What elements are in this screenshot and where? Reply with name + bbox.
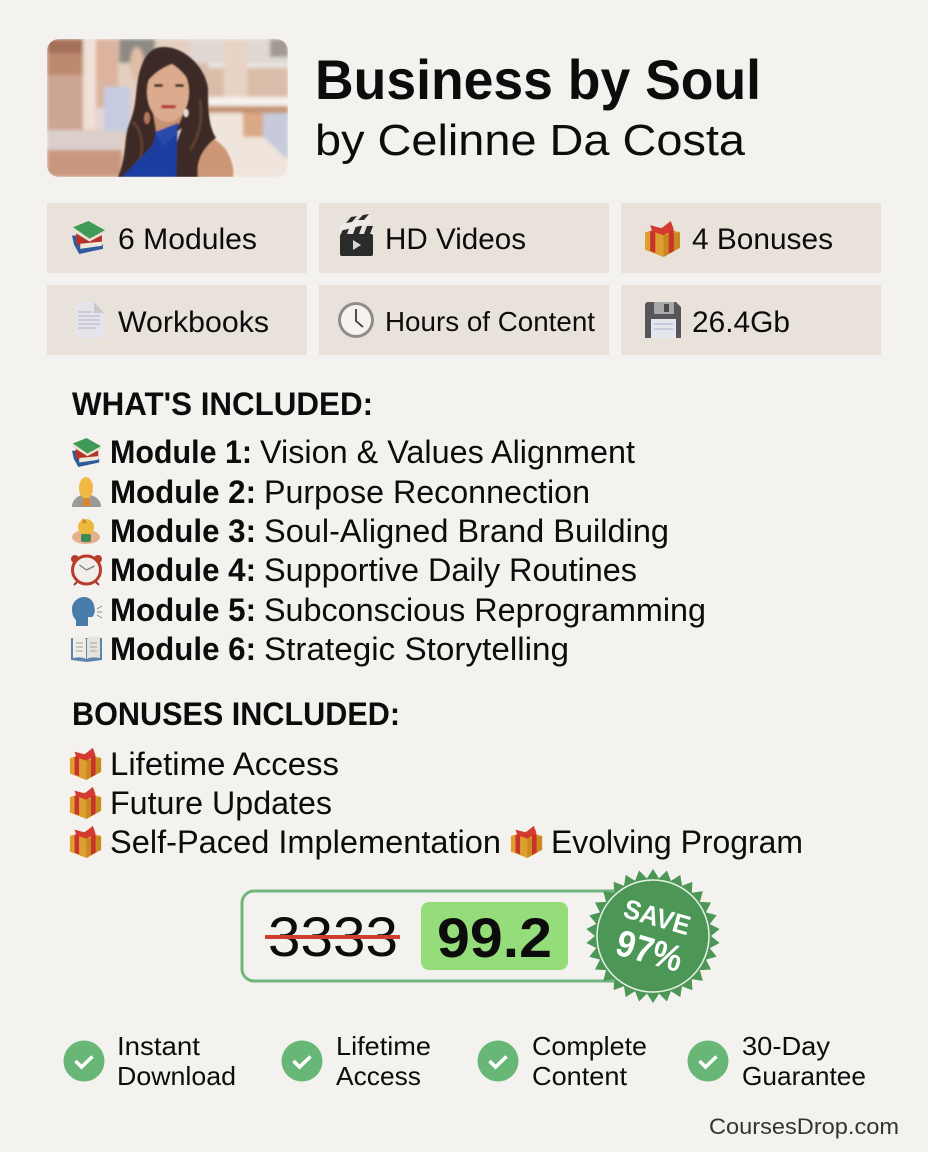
- bonus: lifetime access: Lifetime Access: [110, 746, 339, 782]
- chip: Hours of Content: [319, 285, 609, 355]
- module 2: [72, 474, 590, 510]
- heading: what's included: WHAT'S INCLUDED:: [72, 386, 373, 422]
- badge: save 97%: [579, 863, 727, 1009]
- chip: 4 Bonuses: 4 Bonuses: [692, 223, 833, 256]
- guarantee: instant download: [64, 1031, 236, 1091]
- chip: 26.4Gb: 26.4Gb: [692, 306, 790, 339]
- module 1: [72, 434, 635, 470]
- shoulder: [196, 139, 234, 177]
- watermark: CoursesDrop.com: [709, 1114, 899, 1139]
- module 4: Supportive Daily Routines: [264, 552, 637, 588]
- guarantee: 30-day guarantee: Guarantee: [742, 1061, 866, 1091]
- chip: 4 Bonuses: [621, 203, 881, 273]
- chip: Workbooks: [47, 285, 307, 355]
- chip: Hours of Content: Hours of Content: [385, 306, 595, 337]
- module 4: [71, 552, 637, 588]
- guarantee: lifetime access: Lifetime: [336, 1031, 431, 1061]
- guarantee: 30-day guarantee: [688, 1031, 866, 1091]
- new price: [421, 902, 568, 970]
- guarantee: instant download: Download: [117, 1061, 236, 1091]
- chip: Workbooks: Workbooks: [118, 306, 269, 339]
- bonus: self-paced implementation: Self-Paced Implementation: [110, 824, 501, 860]
- strikethrough: [265, 935, 400, 939]
- guarantee: complete content: [478, 1031, 647, 1091]
- module 5: Module 5:: [110, 592, 256, 628]
- dress: [122, 123, 178, 177]
- guarantee: lifetime access: [282, 1031, 431, 1091]
- chip: HD Videos: [319, 203, 609, 273]
- price box: [242, 891, 632, 981]
- badge: save 97%: 97%: [612, 922, 687, 980]
- neck: [152, 112, 184, 132]
- icon: clapperboard: [339, 214, 373, 256]
- bonus list: [70, 746, 803, 860]
- title: Business by Soul: [315, 48, 761, 111]
- chip: HD Videos: HD Videos: [385, 223, 526, 256]
- module 5: [72, 592, 706, 628]
- icon: floppy disk: [645, 302, 681, 338]
- guarantee: instant download: Instant: [117, 1031, 201, 1061]
- subtitle: by Celinne Da Costa: [315, 116, 746, 165]
- module 6: Module 6:: [110, 631, 256, 667]
- module 1: Module 1:: [110, 434, 252, 470]
- module 3: Soul-Aligned Brand Building: [264, 513, 669, 549]
- module 2: Purpose Reconnection: [264, 474, 590, 510]
- module 6: Strategic Storytelling: [264, 631, 569, 667]
- icon: books: [72, 221, 105, 254]
- bonus: evolving program: Evolving Program: [551, 824, 803, 860]
- module 4: Module 4:: [110, 552, 256, 588]
- module 6: [71, 631, 569, 667]
- module 3: Module 3:: [110, 513, 256, 549]
- chip: 6 Modules: 6 Modules: [118, 223, 257, 256]
- module 1: Vision & Values Alignment: [260, 434, 635, 470]
- module 2: Module 2:: [110, 474, 256, 510]
- module 3: [72, 513, 669, 549]
- old price: 3333: [268, 905, 398, 968]
- guarantee: lifetime access: Access: [336, 1061, 421, 1091]
- chip: 6 Modules: [47, 203, 307, 273]
- module 5: Subconscious Reprogramming: [264, 592, 706, 628]
- hair: [118, 47, 216, 177]
- guarantee: complete content: Content: [532, 1061, 628, 1091]
- chip: 26.4Gb: [621, 285, 881, 355]
- photo: portrait of Celinne Da Costa: [47, 39, 288, 177]
- face: [147, 62, 189, 122]
- icon: clock: [338, 302, 374, 338]
- icon: document: [75, 302, 104, 338]
- guarantee: 30-day guarantee: 30-Day: [742, 1031, 830, 1061]
- badge: save 97%: SAVE: [620, 894, 694, 941]
- guarantee: complete content: Complete: [532, 1031, 647, 1061]
- new price: 99.2: [437, 906, 552, 969]
- heading: bonuses included: BONUSES INCLUDED:: [72, 696, 400, 732]
- icon: gift: [645, 221, 680, 257]
- module list: [71, 434, 706, 667]
- bonus: future updates: Future Updates: [110, 785, 332, 821]
